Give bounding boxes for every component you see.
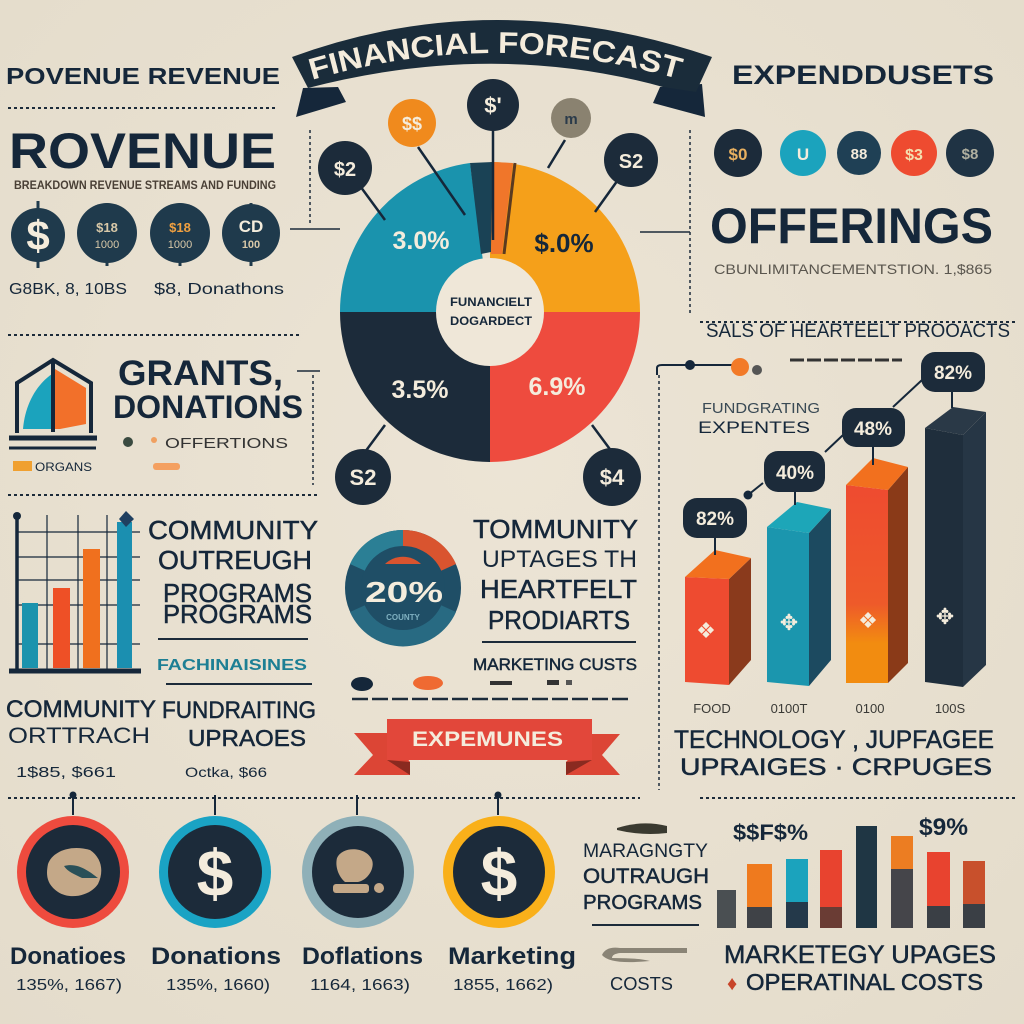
- 3d bar chart: ❖: [858, 608, 878, 633]
- bar 2: [767, 502, 831, 686]
- heading: community outreach: COMMUNITY: [6, 696, 156, 723]
- donut chart: [340, 162, 640, 462]
- bottom labels: Doflations: [302, 943, 423, 970]
- caption: fundraising expenses: EXPENTES: [698, 418, 810, 437]
- pie callouts: S2: [350, 465, 376, 490]
- heading: fundraising upgrades: UPRAOES: [188, 725, 306, 751]
- heading: community upgrades: TOMMUNITY: [473, 514, 638, 544]
- bottom bar chart: $9%: [919, 814, 968, 841]
- donut chart: 3.5%: [392, 376, 448, 404]
- icon: house chart: [9, 360, 97, 448]
- bottom labels: Donatioes: [10, 943, 126, 970]
- caption: fundraisers: FACHINAISINES: [157, 657, 307, 674]
- revenue icons: $18: [96, 220, 118, 235]
- pie callouts: $4: [600, 465, 625, 490]
- heading: community upgrades: [473, 514, 638, 635]
- heading: technology upgrades: UPRAIGES · CRPUGES: [680, 754, 992, 781]
- bottom icon: donations 2: $: [197, 836, 233, 910]
- heading: expenditures: EXPENDDUSETS: [732, 60, 994, 90]
- bottom icon: marketing: [443, 792, 555, 928]
- pie callouts: $2: [334, 159, 356, 181]
- revenue icons: 100: [242, 239, 260, 251]
- heading: community upgrades: HEARTFELT: [480, 574, 637, 604]
- icon: smudge above marketing heading: [617, 823, 667, 834]
- caption: fundraising expenses: [698, 400, 820, 437]
- gauge 20%: [345, 530, 461, 646]
- bottom labels: [10, 943, 576, 994]
- bar 4: [925, 407, 986, 687]
- heading: technology upgrades: TECHNOLOGY , JUPFAGEE: [674, 726, 994, 754]
- pie callouts: m: [564, 111, 578, 128]
- 3d bar chart: ✥: [780, 610, 798, 635]
- pie callouts: $$: [402, 114, 422, 134]
- grants caption: [123, 435, 288, 470]
- bottom labels: 1164, 1663): [310, 977, 410, 994]
- caption: marketing costs: MARKETING CUSTS: [473, 655, 637, 674]
- line and bar chart: [9, 511, 141, 672]
- bottom icon: donations 2: [159, 795, 271, 928]
- heading: rovenue: ROVENUE: [9, 123, 276, 179]
- heading: grants, donations: [113, 354, 303, 425]
- gauge 20%: COUNTY: [386, 613, 421, 622]
- heading: community upgrades: UPTAGES TH: [482, 546, 637, 573]
- expenditure icons: $0: [729, 145, 747, 164]
- heading: marketing upgrades operational costs: MARKETEGY UPAGES: [724, 941, 996, 969]
- 3d bar chart: FOOD: [693, 701, 731, 716]
- icon: smudge above costs: [602, 948, 687, 962]
- 3d bar chart: 82%: [934, 363, 972, 384]
- ribbon: expenses: [354, 719, 620, 775]
- bottom bar chart: [717, 814, 985, 928]
- bottom labels: 135%, 1667): [16, 977, 122, 994]
- 3d bar chart: 100S: [935, 701, 966, 716]
- bottom labels: 135%, 1660): [166, 977, 270, 994]
- pie callouts: $': [484, 93, 502, 118]
- bottom icon: donations 1: [17, 792, 129, 928]
- revenue icons: 1000: [168, 239, 192, 251]
- heading: grants, donations: DONATIONS: [113, 389, 303, 425]
- bottom labels: Donations: [151, 943, 281, 970]
- expenditure icons: $8: [962, 146, 978, 163]
- heading: fundraising upgrades: [162, 697, 316, 751]
- heading: marketing outreach programs: PROGRAMS: [583, 892, 702, 914]
- heading: marketing outreach programs: MARAGNGTY: [583, 841, 708, 862]
- bottom labels: 1855, 1662): [453, 977, 553, 994]
- heading: community outreach programs: PROGRAMS: [163, 599, 312, 629]
- heading: grants, donations: GRANTS,: [118, 354, 283, 393]
- heading: fundraising upgrades: FUNDRAITING: [162, 697, 316, 724]
- small icons row: [351, 676, 572, 691]
- heading: community outreach: [6, 696, 156, 748]
- heading: offerings: OFFERINGS: [710, 198, 993, 254]
- caption left: 1$85, $661: [16, 764, 116, 781]
- revenue icons: $: [26, 212, 50, 259]
- donut chart: $.0%: [534, 228, 594, 258]
- 3d bar chart: 40%: [776, 463, 814, 484]
- title banner: FINANCIAL FORECAST: [308, 32, 684, 80]
- revenue icons: CD: [239, 217, 263, 236]
- heading: marketing outreach programs: [583, 841, 709, 914]
- heading: provenue revenue: POVENUE REVENUE: [6, 63, 280, 89]
- revenue icons: $18: [169, 220, 191, 235]
- heading: community outreach programs: PROGRAMS: [163, 578, 312, 608]
- pie callouts: S2: [619, 151, 643, 173]
- revenue icons: [11, 201, 280, 268]
- heading: marketing upgrades operational costs: ♦: [727, 973, 737, 995]
- 3d bar chart: [657, 352, 986, 716]
- donut chart: 6.9%: [529, 373, 585, 401]
- icon caption: ORGANS: [35, 460, 92, 474]
- 3d bar chart: 0100T: [771, 701, 807, 716]
- heading: marketing upgrades operational costs: [724, 941, 996, 995]
- heading: community outreach programs: COMMUNITY: [148, 515, 318, 545]
- 3d bar chart: 48%: [854, 419, 892, 440]
- expenditure icons: $3: [905, 147, 923, 164]
- grants caption: OFFERTIONS: [165, 435, 288, 452]
- icon caption: [13, 460, 92, 474]
- caption: costs: COSTS: [610, 974, 673, 994]
- bottom icon: marketing: $: [481, 836, 517, 910]
- 3d bar chart: 82%: [696, 509, 734, 530]
- caption: sales of heartfelt products: SALS OF HEARTEELT PROOACTS: [706, 321, 1010, 342]
- heading: community outreach programs: OUTREUGH: [158, 545, 312, 575]
- bar 1: [685, 550, 751, 685]
- revenue icons: 1000: [95, 239, 119, 251]
- bottom bar chart: $$F$%: [733, 820, 808, 845]
- 3d bar chart: ✥: [936, 604, 954, 629]
- heading: marketing upgrades operational costs: OPERATINAL COSTS: [746, 969, 983, 995]
- revenue icon labels: G8BK, 8, 10BS: [9, 281, 127, 298]
- donut chart: DOGARDECT: [450, 314, 533, 328]
- heading: community outreach: ORTTRACH: [8, 723, 150, 748]
- donut chart: 3.0%: [393, 227, 449, 255]
- pie callouts: [318, 79, 658, 506]
- expenditure icons: 88: [851, 146, 867, 163]
- caption right: Octka, $66: [185, 764, 267, 780]
- gauge 20%: 20%: [365, 577, 443, 609]
- bar 3: [846, 458, 908, 683]
- offerings caption: CBUNLIMITANCEMENTSTION. 1,$865: [714, 261, 992, 277]
- heading: community upgrades: PRODIARTS: [488, 605, 630, 635]
- heading: community outreach programs: [148, 515, 318, 629]
- heading: marketing outreach programs: OUTRAUGH: [583, 865, 709, 888]
- bottom labels: Marketing: [448, 943, 576, 970]
- expenditure icons: [714, 129, 994, 177]
- donut chart: FUNANCIELT: [450, 295, 533, 309]
- heading: technology upgrades: [674, 726, 994, 781]
- 3d bar chart: 0100: [856, 701, 884, 716]
- expenditure icons: U: [797, 145, 809, 164]
- revenue icon labels right: $8, Donathons: [154, 281, 284, 298]
- revenue caption: BREAKDOWN REVENUE STREAMS AND FUNDING: [14, 178, 276, 192]
- title banner: [292, 20, 712, 117]
- bottom icon: donations 3: [302, 795, 414, 928]
- 3d bar chart: ❖: [696, 618, 716, 643]
- ribbon: expenses: EXPEMUNES: [412, 728, 563, 751]
- caption: fundraising expenses: FUNDGRATING: [702, 400, 820, 417]
